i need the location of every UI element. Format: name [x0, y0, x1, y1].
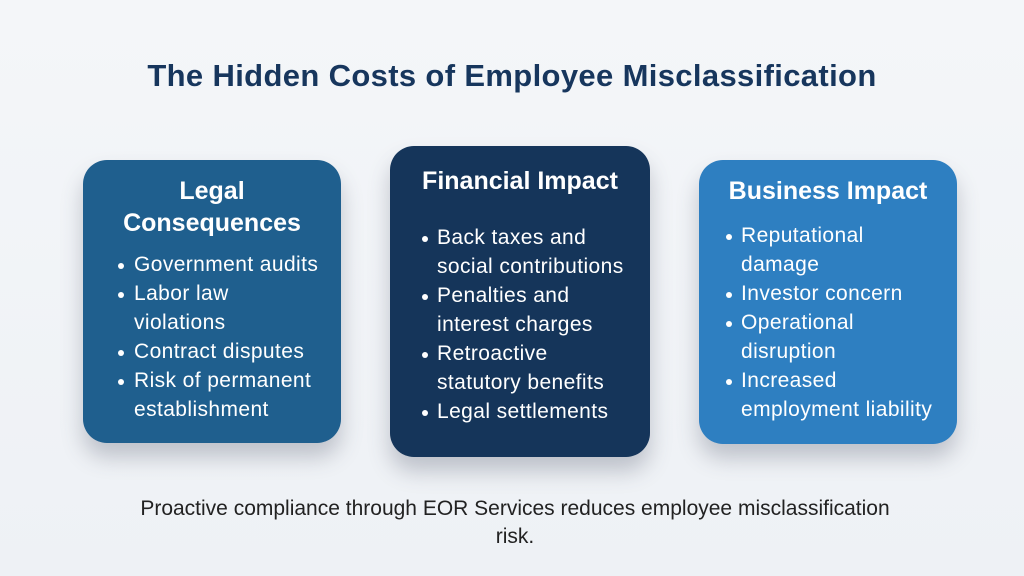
bullet list: financial: Penalties and: [437, 284, 569, 307]
bullet list: financial: Retroactive: [437, 342, 548, 365]
heading: legal: Consequences: [123, 209, 301, 237]
bullet list: financial: Legal settlements: [437, 400, 608, 423]
heading: legal: Legal: [179, 177, 245, 205]
bullet list: legal: Contract disputes: [134, 340, 304, 363]
heading: business: Business Impact: [729, 177, 927, 205]
bullet list: legal: violations: [134, 311, 226, 334]
heading: financial: Financial Impact: [422, 167, 618, 195]
bullet list: financial: Back taxes and: [437, 226, 586, 249]
footer text: Proactive compliance through EOR Services reduces employee misclassification: [140, 497, 890, 520]
bullet list: legal: Government audits: [134, 253, 318, 276]
bullet list: business: Operational: [741, 311, 854, 334]
bullet list: business: Reputational: [741, 224, 864, 247]
bullet list: legal: [118, 253, 318, 421]
bullet list: financial: interest charges: [437, 313, 593, 336]
bullet list: legal: establishment: [134, 398, 269, 421]
panel: business impact: [699, 160, 957, 444]
bullet list: financial: [422, 226, 624, 423]
bullet list: business: [726, 224, 932, 421]
bullet list: business: Increased: [741, 369, 837, 392]
bullet list: legal: Risk of permanent: [134, 369, 311, 392]
panel: financial impact: [390, 146, 650, 457]
footer text: [140, 497, 890, 548]
bullet list: business: disruption: [741, 340, 836, 363]
bullet list: legal: Labor law: [134, 282, 229, 305]
bullet list: business: employment liability: [741, 398, 932, 421]
bullet list: financial: social contributions: [437, 255, 624, 278]
heading: legal: [123, 177, 301, 237]
bullet list: business: Investor concern: [741, 282, 903, 305]
title: The Hidden Costs of Employee Misclassification: [147, 58, 877, 93]
bullet list: financial: statutory benefits: [437, 371, 604, 394]
footer text: risk.: [496, 525, 534, 548]
panel: legal consequences: [83, 160, 341, 443]
bullet list: business: damage: [741, 253, 819, 276]
